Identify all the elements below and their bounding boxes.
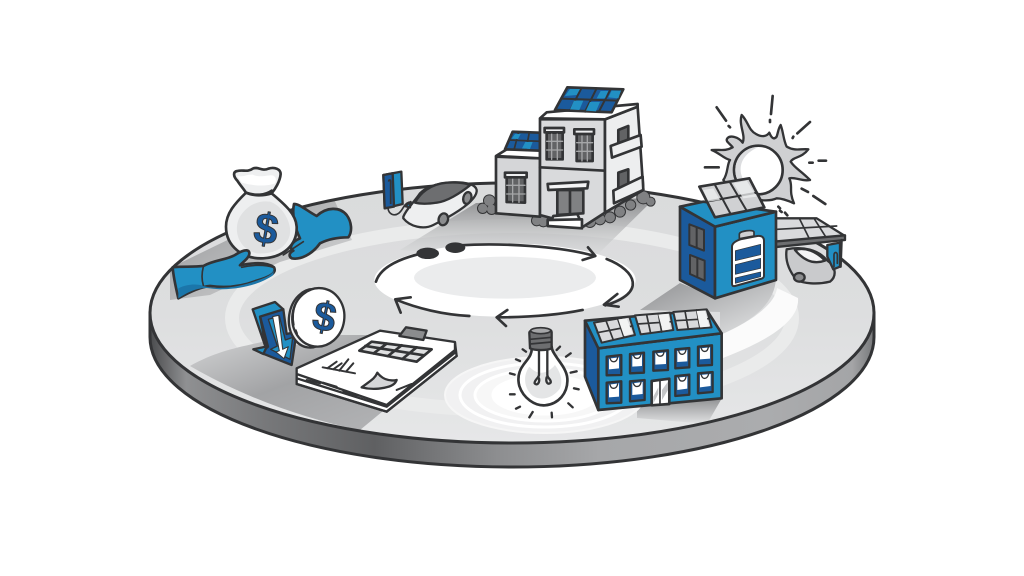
cycle arrows xyxy=(374,242,636,326)
right glove xyxy=(290,204,351,259)
clip xyxy=(399,327,427,340)
arrows xyxy=(376,244,633,326)
bulb rays xyxy=(510,347,579,417)
parked car xyxy=(786,248,835,283)
table xyxy=(359,342,432,362)
door and porch xyxy=(548,182,588,228)
shrubs xyxy=(478,191,655,227)
right wall xyxy=(605,107,643,213)
roof xyxy=(540,104,638,119)
sun disc xyxy=(734,146,783,194)
inner oval xyxy=(414,257,596,299)
carport with car xyxy=(773,218,845,283)
office door xyxy=(652,379,669,405)
charger station xyxy=(383,172,409,215)
report document xyxy=(297,327,457,412)
dollar sign: $ xyxy=(250,204,282,255)
sun rays xyxy=(705,96,826,215)
bulb cap xyxy=(529,329,552,350)
folded corner xyxy=(362,373,397,389)
down arrow xyxy=(253,302,297,365)
office windows xyxy=(607,345,713,403)
main front wall xyxy=(540,119,605,227)
balconies xyxy=(611,126,643,203)
dollar coin xyxy=(285,285,348,351)
coin dollar sign: $ xyxy=(309,292,341,342)
battery icon xyxy=(732,231,764,286)
ripple glow around bulb xyxy=(445,357,645,433)
light bulb xyxy=(510,328,579,417)
electric car xyxy=(403,182,477,227)
upper windows xyxy=(545,128,594,161)
office building xyxy=(585,309,722,410)
small solar array xyxy=(505,132,540,151)
money bag and gloved hands xyxy=(173,168,351,298)
battery building xyxy=(680,178,776,298)
side windows xyxy=(689,224,705,281)
small window xyxy=(505,173,527,203)
money bag xyxy=(226,193,297,258)
start dots xyxy=(416,242,465,259)
carport charger xyxy=(827,243,840,269)
white ring xyxy=(374,243,636,317)
large solar array xyxy=(555,87,623,112)
bars xyxy=(323,359,355,373)
roof panels xyxy=(699,178,764,217)
left wing xyxy=(496,157,540,217)
platform disc xyxy=(150,183,874,467)
house with solar panels xyxy=(478,87,655,228)
sun flames xyxy=(712,115,810,203)
bulb filament xyxy=(535,349,551,384)
office panels xyxy=(594,309,712,343)
left glove xyxy=(173,250,275,298)
sun xyxy=(705,96,826,215)
